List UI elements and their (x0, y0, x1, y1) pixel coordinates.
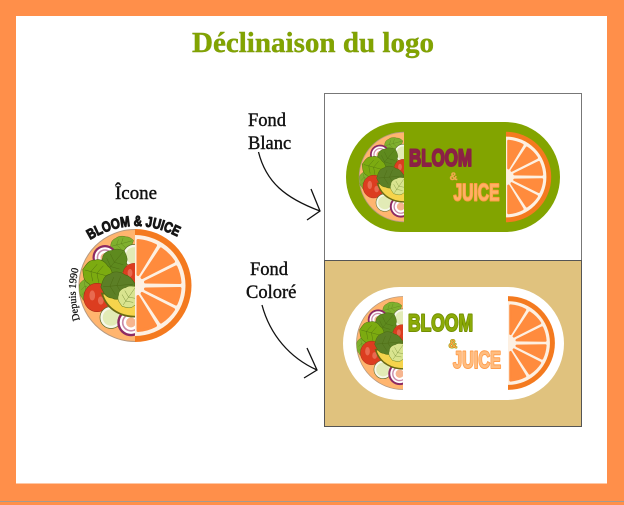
icon text: since 1990: Depuis 1990 (68, 268, 80, 322)
icon label: Îcone (115, 182, 157, 204)
logo pill: green (346, 122, 560, 232)
icon: salad half (77, 230, 191, 342)
label: white background: Blanc (248, 134, 291, 154)
title: Déclinaison du logo (192, 27, 434, 59)
wordmark: Bloom: BLOOM (409, 145, 472, 172)
salad half (358, 132, 449, 222)
arrow: to coloured background (262, 305, 317, 378)
label: coloured background: Coloré (246, 283, 296, 303)
icon: Bloom & Juice round logo (68, 215, 192, 342)
wordmark: Juice: JUICE (454, 180, 500, 206)
wordmark: ampersand: & (448, 337, 458, 351)
wordmark: ampersand: & (450, 171, 458, 183)
orange half (508, 296, 555, 390)
icon text: brand name: BLOOM & JUICE (85, 215, 182, 240)
label: white background: Fond (248, 111, 287, 131)
panel: white background version (324, 94, 582, 260)
panel: coloured background version (324, 260, 582, 426)
orange half (506, 132, 551, 222)
wordmark: Juice: JUICE (453, 347, 501, 374)
wordmark: Bloom: BLOOM (408, 310, 473, 337)
label: coloured background: Fond (250, 260, 289, 280)
logo pill: white (343, 287, 564, 400)
icon: orange half (135, 229, 192, 342)
salad half (355, 297, 449, 389)
arrow: to white background (258, 152, 320, 220)
